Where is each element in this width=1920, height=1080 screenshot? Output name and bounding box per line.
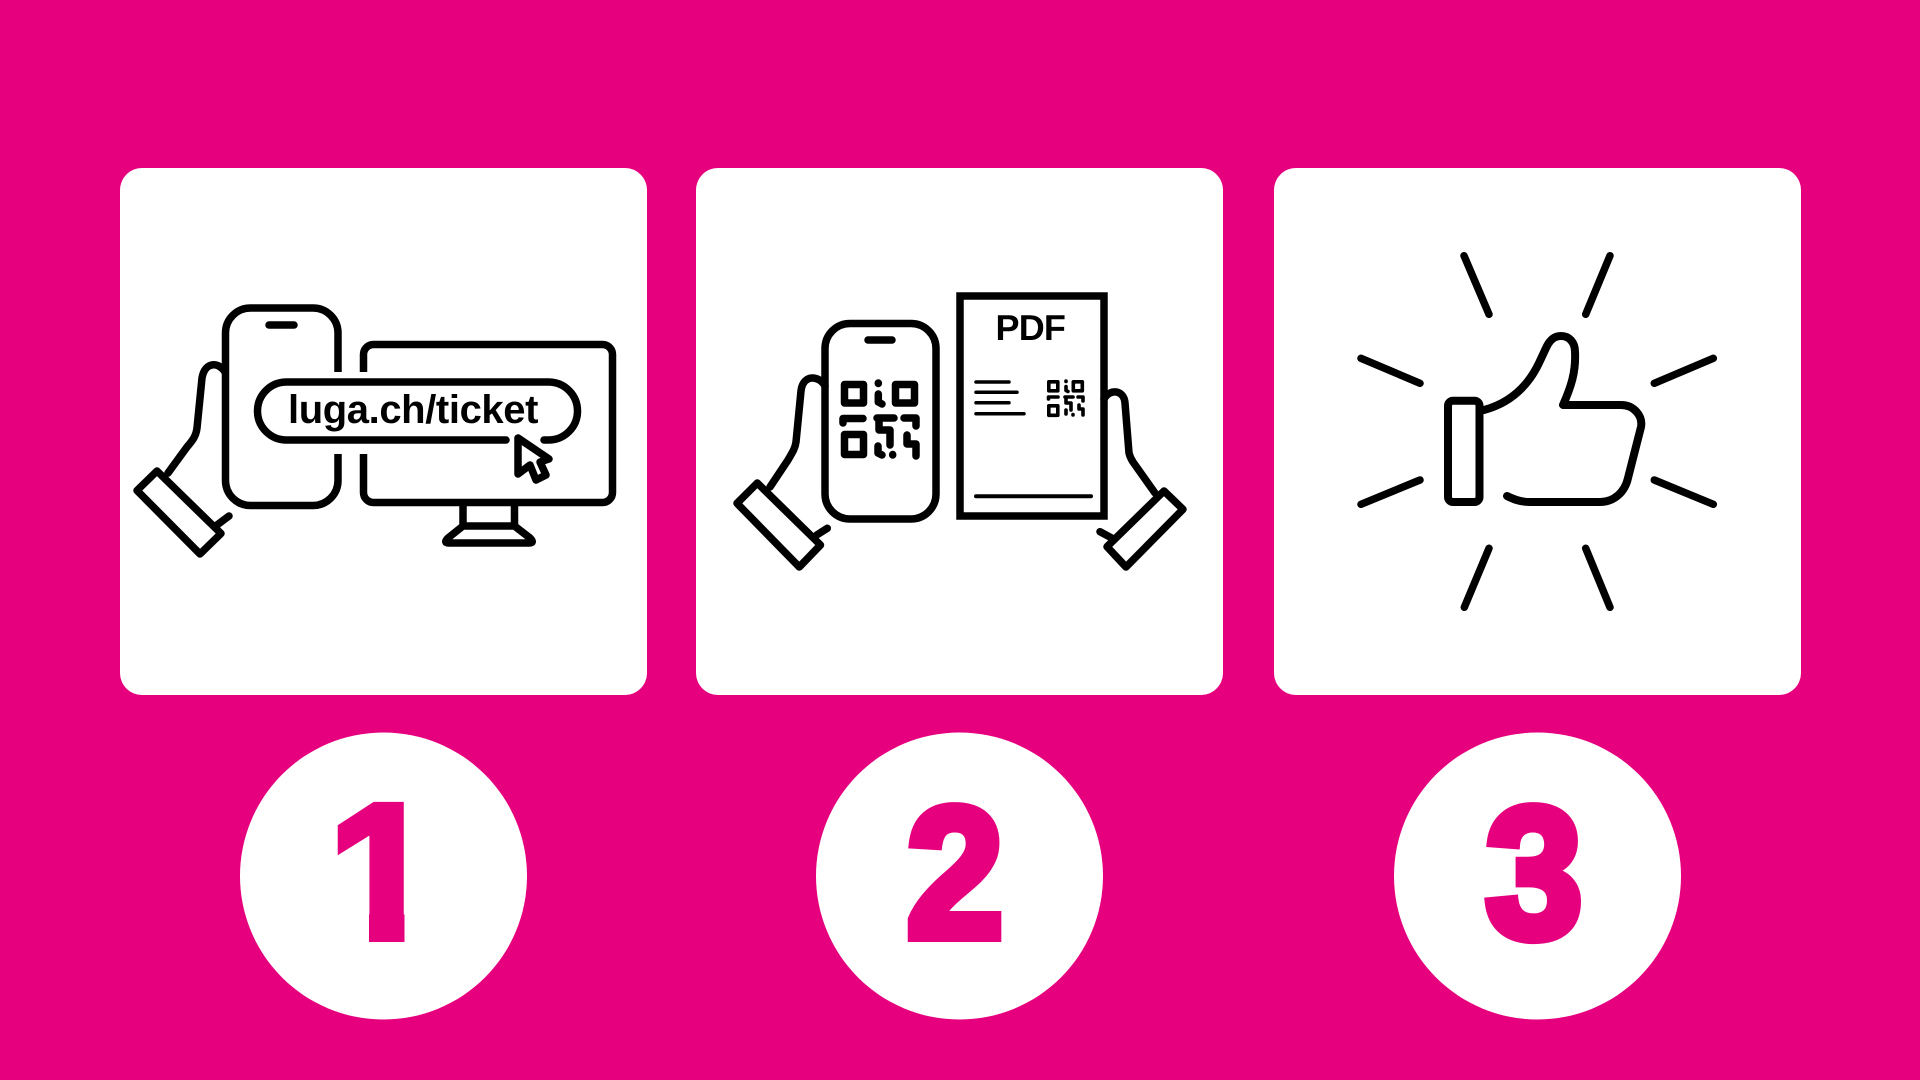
icon: phone: [226, 308, 338, 506]
icon: hand: [1484, 336, 1641, 502]
icon: phone notch: [868, 336, 892, 344]
icon: QR code large: [843, 383, 916, 456]
URL text: luga.ch/ticket: [288, 388, 538, 432]
badge: number 1: [240, 732, 527, 1020]
icon: right hand finger: [1100, 532, 1112, 538]
panel: step 2 QR code and PDF: [696, 168, 1223, 695]
icon: right hand cuff: [1107, 491, 1183, 567]
badge: number 2: 2: [906, 770, 1004, 977]
icon: document: [960, 296, 1104, 516]
icon: left hand finger: [817, 528, 827, 535]
badge: number 2: [816, 732, 1103, 1020]
icon: thumb cuff: [1448, 401, 1480, 502]
icon: right hand thumb: [1104, 392, 1155, 493]
icon: hand thumb: [168, 365, 225, 473]
panel: step 3 thumbs up: [1274, 168, 1801, 695]
icon: hand cuff: [137, 471, 221, 554]
icon: document lines: [976, 382, 1091, 496]
panel: step 1 order online: [120, 168, 647, 695]
icon: hand holding phone and desktop with URL: [137, 308, 612, 554]
icon: monitor stand: [446, 505, 532, 543]
icon: hands holding phone and PDF: [737, 296, 1183, 567]
infographic: three ticket steps: [120, 168, 1801, 1020]
icon: monitor: [364, 344, 612, 502]
icon: left hand cuff: [737, 483, 820, 567]
icon: phone notch: [269, 321, 294, 329]
icon: QR code small: [1048, 381, 1083, 415]
icon: phone: [825, 324, 936, 519]
icon: thumbs up with rays: [1361, 256, 1713, 607]
badge: number 3: [1394, 732, 1681, 1020]
badge: number 3: 3: [1485, 770, 1583, 977]
icon: hand finger: [217, 516, 229, 525]
icon: left hand thumb: [770, 378, 825, 487]
icon: cursor: [518, 438, 549, 480]
icon: URL bar: [258, 382, 578, 440]
PDF text: PDF: [996, 307, 1065, 348]
icon: rays: [1361, 256, 1713, 607]
badge: number 1: 1: [329, 764, 435, 979]
